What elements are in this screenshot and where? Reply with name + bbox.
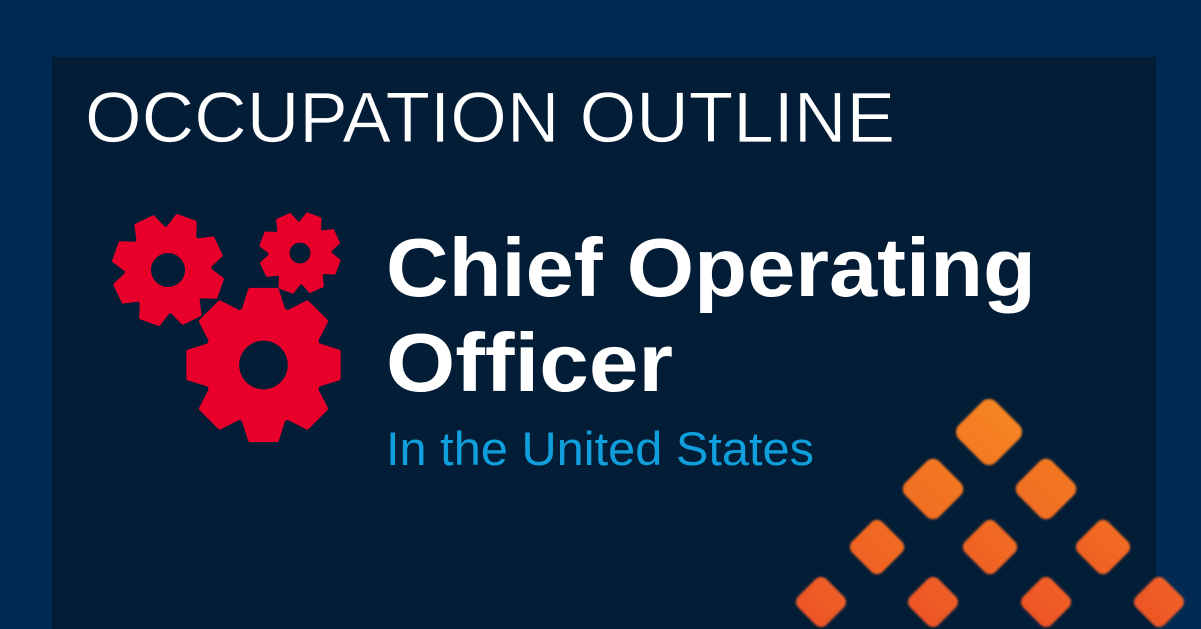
heading: occupation outline: OCCUPATION OUTLINE [85, 79, 895, 158]
decoration: orange diamond pyramid [793, 395, 1187, 629]
gear: upper right small [247, 200, 353, 306]
job title [386, 221, 1036, 409]
icon: three red gears [94, 196, 353, 440]
subtitle: location: In the United States [386, 422, 814, 475]
job title: Officer [386, 316, 673, 409]
gear: upper left [94, 196, 242, 344]
gear: large bottom [189, 290, 338, 440]
job title: Chief Operating [386, 221, 1036, 314]
